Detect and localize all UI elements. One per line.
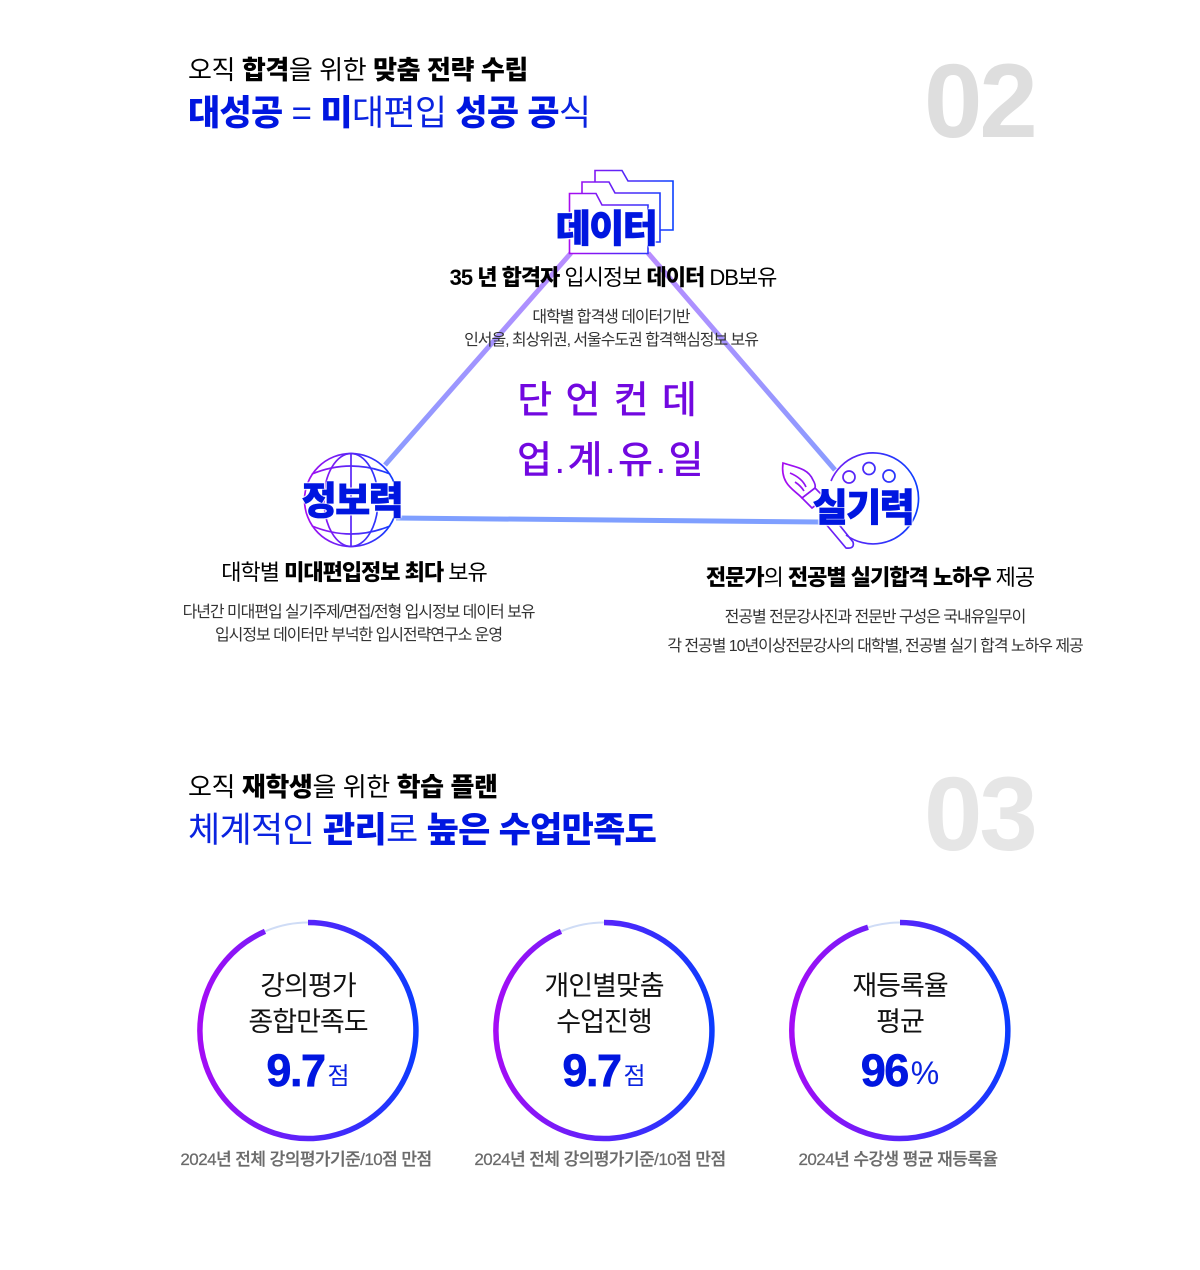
skill description: 전공별 전문강사진과 전문반 구성은 국내유일무이 (725, 609, 1025, 626)
text block: information (183, 560, 535, 644)
icon: globe (304, 453, 398, 547)
stat 3 caption: 2024년 수강생 평균 재등록율 (798, 1150, 998, 1169)
stat 2 title: 개인별맞춤 (544, 971, 664, 1001)
text block: data (450, 265, 776, 349)
information subheading: 대학별 미대편입정보 최다 보유 (221, 560, 487, 585)
line one: 단 언 컨 데 (517, 380, 697, 422)
ring 1 (200, 922, 416, 1139)
skill description: 각 전공별 10년이상전문강사의 대학별, 전공별 실기 합격 노하우 제공 (667, 638, 1083, 655)
center purple text (517, 380, 706, 482)
stat 3 title: 재등록율 (852, 971, 948, 1001)
section 03 heading (188, 772, 656, 850)
information description: 입시정보 데이터만 부넉한 입시전략연구소 운영 (215, 627, 502, 644)
section number 02: 02 (924, 43, 1035, 160)
stat 1 value: 9.7점 (266, 1045, 350, 1096)
ring 3 (792, 922, 1008, 1138)
stat 1 title: 강의평가 (260, 971, 356, 1001)
icon: folders (570, 170, 673, 254)
triangle connector lines (385, 253, 835, 522)
stat 2 title (544, 971, 664, 1037)
information description: 다년간 미대편입 실기주제/면접/전형 입시정보 데이터 보유 (183, 604, 534, 621)
ring 2 (496, 922, 712, 1139)
stat 1 (180, 971, 432, 1169)
stat 1 title: 종합만족도 (248, 1007, 368, 1037)
triangle diagram (304, 170, 920, 549)
stat 2 caption: 2024년 전체 강의평가기준/10점 만점 (474, 1150, 726, 1169)
section 02 heading (188, 55, 590, 133)
label: data: 데이터 (556, 209, 656, 251)
label: practical skill: 실기력 (813, 488, 913, 530)
information description (183, 604, 535, 644)
data subheading: 35 년 합격자 입시정보 데이터 DB보유 (450, 265, 776, 290)
section number 03: 03 (924, 756, 1035, 873)
data description (464, 308, 758, 349)
eyebrow heading: 오직 재학생을 위한 학습 플랜 (188, 772, 498, 802)
icon: palette and brush (783, 453, 919, 548)
stat 3 title: 평균 (876, 1007, 924, 1037)
stat 2 title: 수업진행 (556, 1007, 652, 1037)
stat 3 title (852, 971, 948, 1037)
stat 3 value: 96% (861, 1045, 939, 1096)
text block: practical skill (667, 565, 1083, 655)
eyebrow heading: 오직 합격을 위한 맞춤 전략 수립 (188, 55, 528, 85)
stat 1 caption: 2024년 전체 강의평가기준/10점 만점 (180, 1150, 432, 1169)
data description: 인서울, 최상위권, 서울수도권 합격핵심정보 보유 (464, 332, 758, 349)
label: information: 정보력 (302, 481, 402, 523)
skill subheading: 전문가의 전공별 실기합격 노하우 제공 (706, 565, 1034, 590)
stat 2 (474, 971, 726, 1169)
line two: 업.계.유.일 (517, 440, 706, 482)
stat 1 title (248, 971, 368, 1037)
stat 2 value: 9.7점 (562, 1045, 646, 1096)
stat rings (197, 920, 1011, 1142)
main heading: 대성공 = 미대편입 성공 공식 (188, 94, 590, 133)
skill description (667, 608, 1083, 655)
stat 3 (798, 971, 998, 1169)
data description: 대학별 합격생 데이터기반 (532, 309, 690, 326)
main heading: 체계적인 관리로 높은 수업만족도 (188, 811, 656, 850)
